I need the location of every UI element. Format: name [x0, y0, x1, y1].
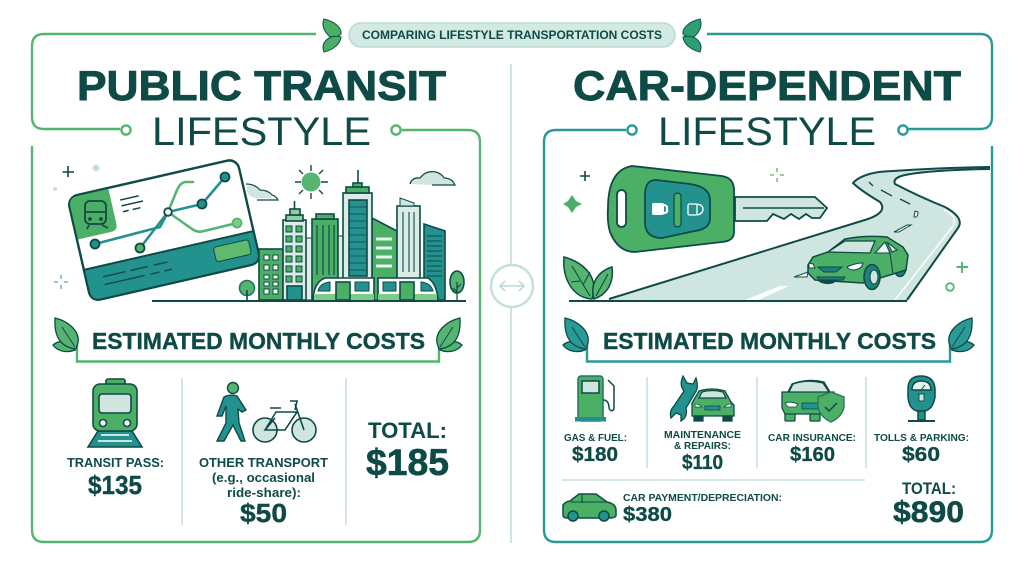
icon: side view car [563, 494, 616, 521]
title: public transit [77, 62, 446, 154]
cost item: tolls and parking [874, 376, 969, 466]
icon: parking meter [908, 376, 935, 421]
cost item: tolls and parking: TOLLS & PARKING: [874, 432, 969, 444]
icon: sun [295, 165, 328, 199]
total: transit: TOTAL: [368, 418, 447, 443]
cost item: transit pass: $135 [88, 470, 142, 500]
route map lines [90, 172, 242, 252]
cost item: maintenance and repairs: $110 [682, 452, 723, 474]
cost item: other transport: $50 [240, 498, 287, 528]
title: public transit: PUBLIC TRANSIT [77, 62, 446, 109]
icon: bicycle [253, 401, 316, 442]
cost item: other transport: ride-share): [227, 486, 301, 500]
illustration: green car [794, 236, 908, 290]
total: transit [366, 418, 449, 483]
icon: fuel pump [575, 376, 614, 422]
header pill: COMPARING LIFESTYLE TRANSPORTATION COSTS [362, 30, 662, 42]
center divider line [510, 64, 512, 543]
icon: comparison arrows [491, 265, 533, 307]
header pill [349, 23, 675, 47]
total: car: TOTAL: [902, 479, 956, 498]
decorative sparkles: car [563, 168, 968, 291]
cost item: car insurance: CAR INSURANCE: [768, 432, 856, 444]
cost item: other transport: (e.g., occasional [212, 471, 315, 485]
cost item: tolls and parking: $60 [902, 444, 940, 466]
title: car-dependent: LIFESTYLE [658, 110, 876, 154]
total: car [893, 479, 964, 529]
icon: leaf on road [564, 257, 612, 299]
cost item: car payment: $380 [623, 504, 672, 526]
cost item: maintenance and repairs [664, 376, 741, 474]
cost item: other transport: OTHER TRANSPORT [199, 456, 328, 470]
cost item: transit pass: TRANSIT PASS: [67, 456, 164, 470]
section heading: car estimated monthly costs: ESTIMATED MONTHLY COSTS [603, 328, 936, 354]
cost item: car payment [563, 492, 782, 526]
title: public transit: LIFESTYLE [152, 110, 371, 154]
panel: public transit frame [32, 34, 480, 542]
title: car-dependent: CAR-DEPENDENT [573, 62, 961, 109]
cost item: transit pass [67, 379, 164, 500]
total: transit: $185 [366, 442, 449, 483]
clouds [246, 172, 455, 200]
cost item: car insurance [768, 380, 856, 466]
illustration: transit card [67, 158, 261, 302]
section heading: transit estimated monthly costs [53, 318, 462, 362]
section heading: car estimated monthly costs [563, 318, 974, 362]
illustration: road [569, 167, 990, 301]
cost item: gas and fuel: $180 [572, 444, 618, 466]
icon: train on card [85, 201, 108, 229]
dividers [182, 377, 866, 525]
cost item: gas and fuel: GAS & FUEL: [564, 432, 627, 444]
title: car-dependent [573, 62, 961, 154]
illustration: car key [608, 166, 827, 252]
icon: car and shield [782, 380, 844, 422]
cost item: car payment: CAR PAYMENT/DEPRECIATION: [623, 492, 782, 504]
trains [313, 278, 438, 300]
icon: header leaf left [323, 19, 341, 52]
section heading: transit estimated monthly costs: ESTIMATED MONTHLY COSTS [92, 328, 425, 354]
panel: car-dependent frame [544, 34, 992, 542]
decorative sparkles: transit [53, 164, 100, 289]
cost item: maintenance and repairs: & REPAIRS: [674, 440, 731, 452]
cost item: maintenance and repairs: MAINTENANCE [664, 429, 741, 441]
icon: wrench and car [670, 376, 734, 421]
cost item: other transport [199, 382, 328, 528]
total: car: $890 [893, 496, 964, 529]
icon: walking person [217, 382, 246, 441]
cost item: gas and fuel [564, 376, 627, 466]
cost item: car insurance: $160 [790, 444, 835, 466]
icon: train [88, 379, 142, 447]
illustration: city skyline [152, 165, 466, 301]
icon: header leaf right [683, 19, 701, 52]
trees [240, 271, 464, 300]
